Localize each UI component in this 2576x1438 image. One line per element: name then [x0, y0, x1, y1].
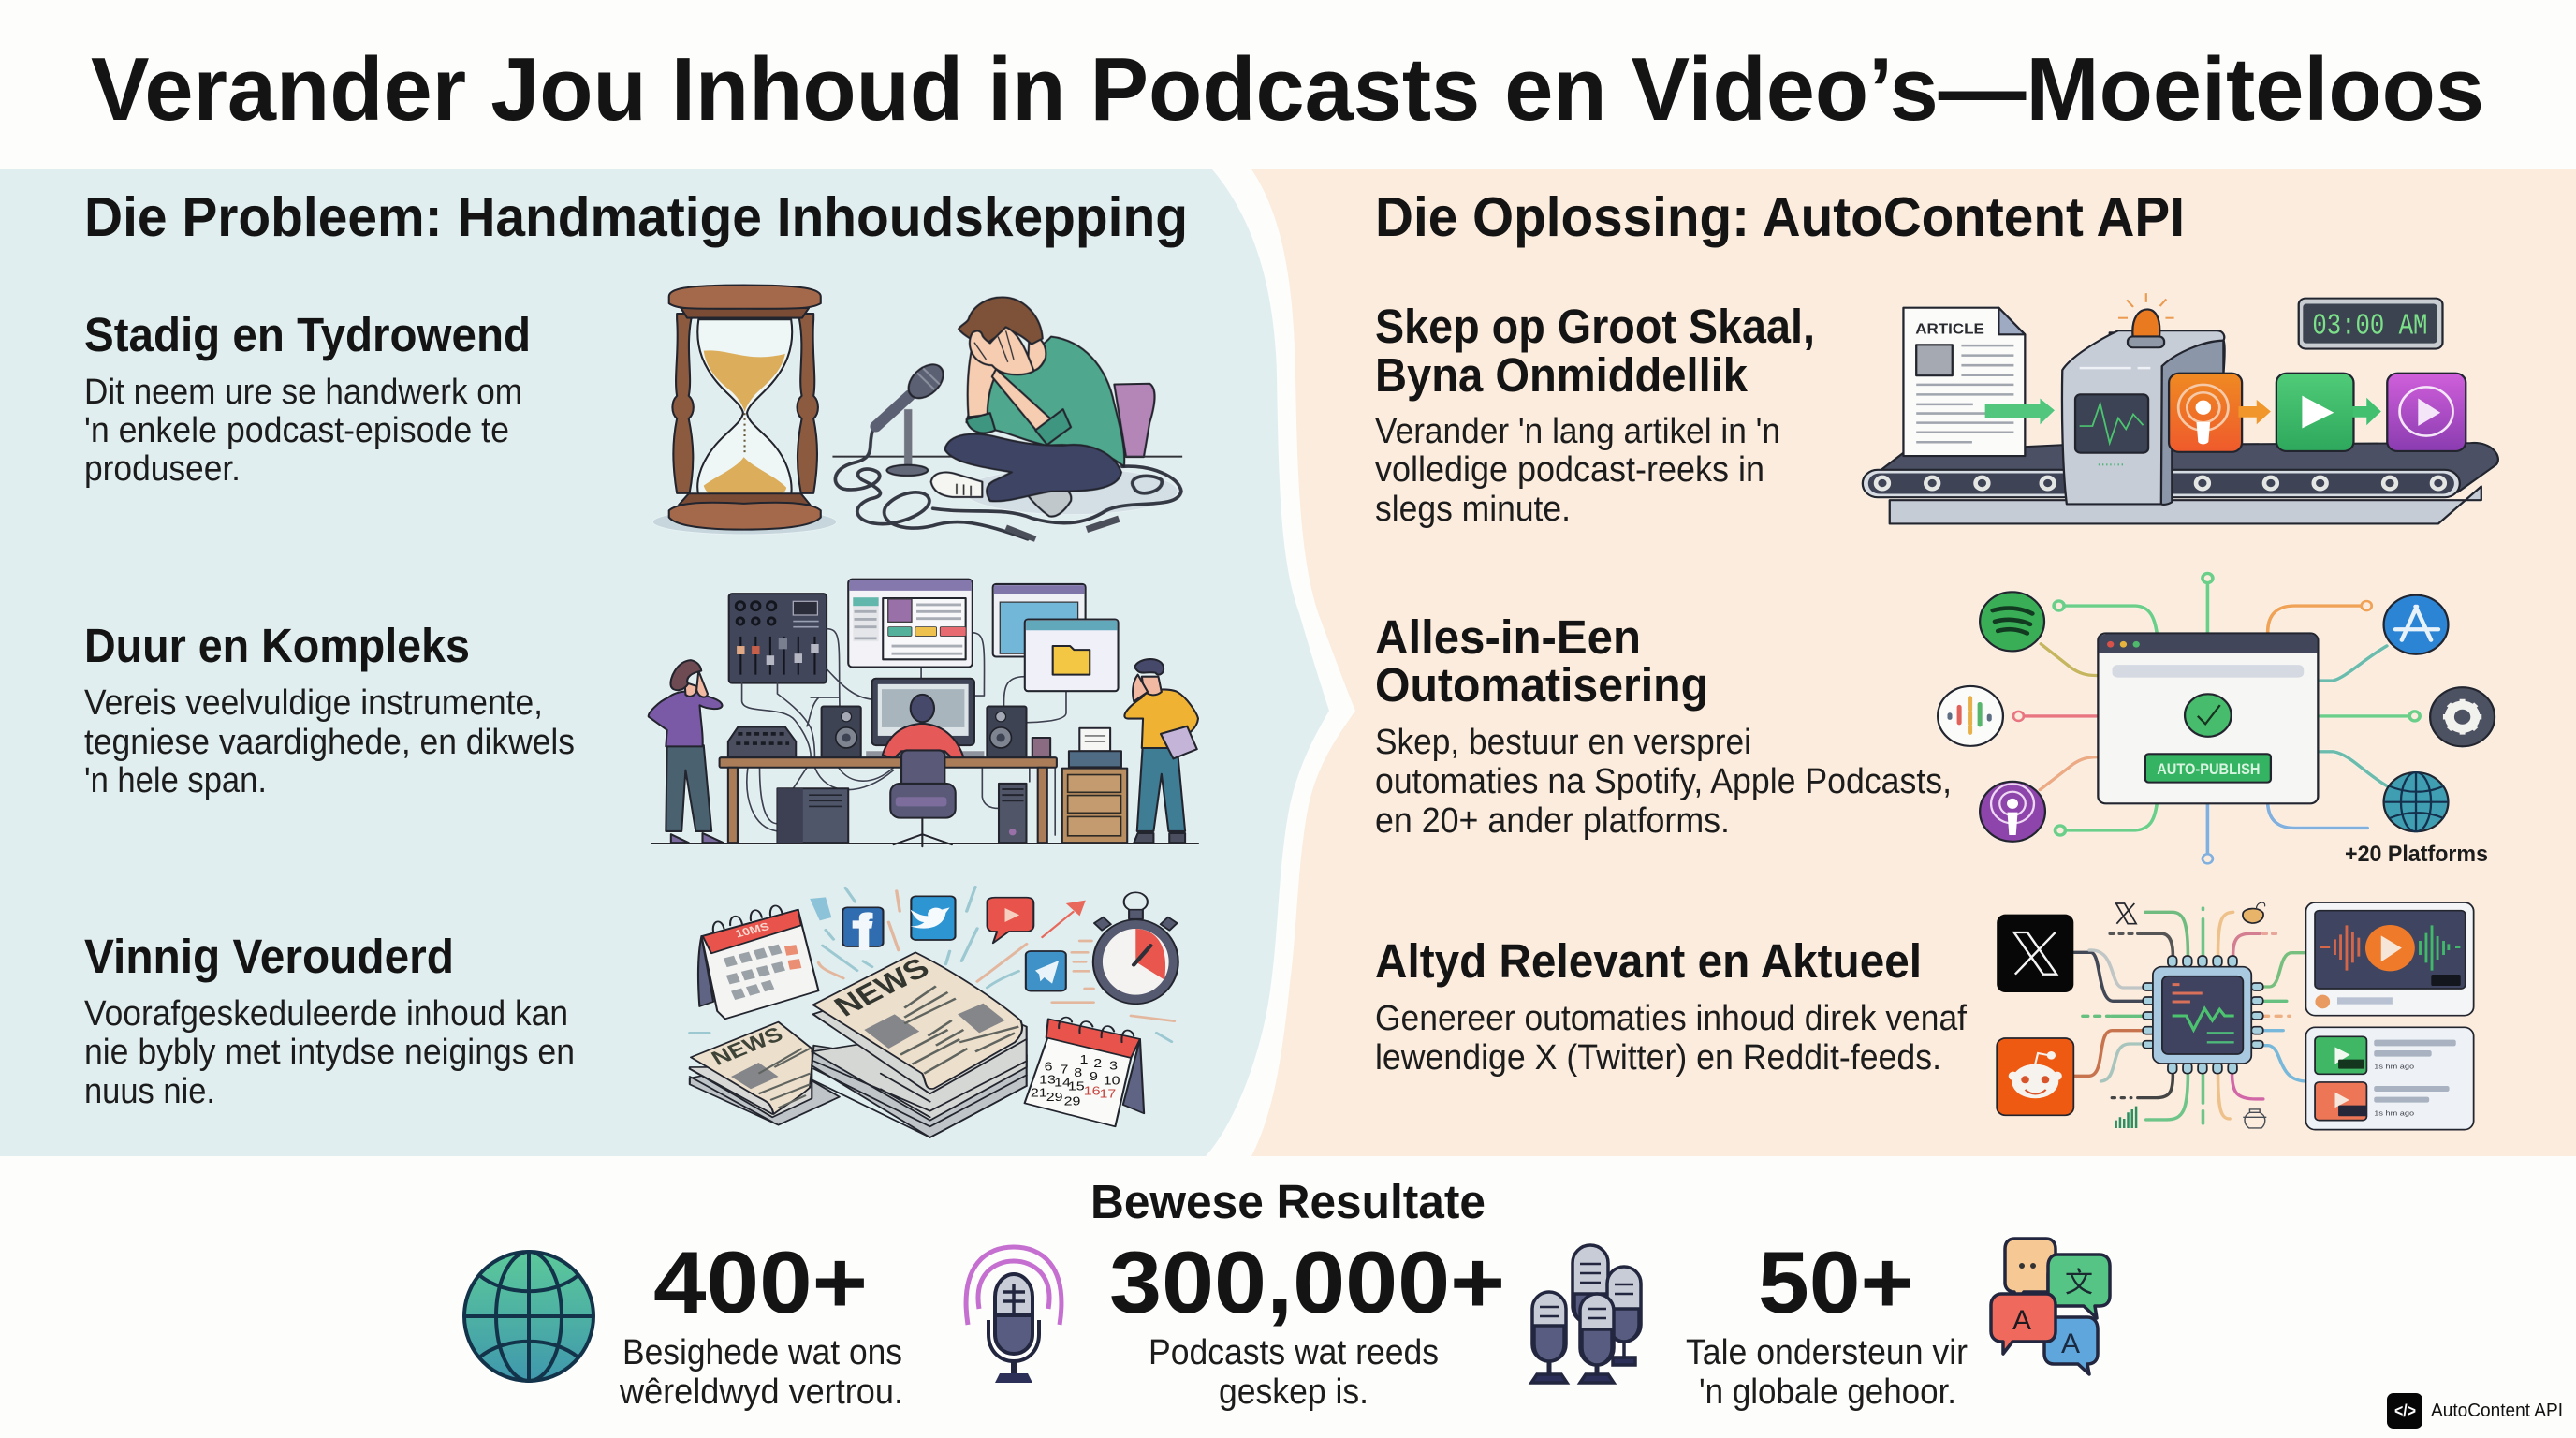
stat: languages	[1686, 1233, 1968, 1412]
problem item: slow and time-consuming: 'n enkele podcast-episode te	[84, 411, 509, 450]
icon: feed list card: 1s hm ago	[2374, 1109, 2415, 1118]
desk	[720, 727, 1057, 843]
solution item: relevant: Genereer outomaties inhoud direk venaf	[1375, 999, 1967, 1038]
speed marks	[690, 887, 1175, 1042]
icon: calendar right: 9	[1090, 1070, 1098, 1083]
computer towers	[777, 784, 1026, 843]
arrow	[1985, 399, 2055, 424]
icon: calendar right: 21	[1031, 1087, 1047, 1100]
icon: calendar right: 29	[1064, 1095, 1080, 1108]
icon: play tile	[2276, 374, 2353, 451]
stat: languages: Tale ondersteun vir	[1686, 1333, 1968, 1372]
icon: video card	[2305, 902, 2474, 1016]
icon: mixer panel	[729, 594, 827, 683]
arrow	[2238, 400, 2271, 424]
illustration: stressed podcaster	[832, 297, 1182, 539]
icon: google podcasts	[1938, 686, 2003, 746]
icon: podcast tile	[2169, 374, 2242, 452]
icon: calendar right: 16	[1084, 1085, 1100, 1098]
cables	[742, 629, 1066, 835]
problem item: slow and time-consuming: Stadig en Tydrowend	[84, 308, 531, 361]
icon: browser window	[2098, 633, 2318, 803]
icon: calendar right: 29	[1046, 1091, 1063, 1104]
stat: businesses: Besighede wat ons	[622, 1333, 902, 1372]
icon: globe	[2384, 772, 2448, 831]
icon: central monitor and person	[866, 679, 984, 758]
person: woman	[649, 660, 724, 843]
panel: problem background	[0, 169, 1329, 1156]
icon: translation chat bubbles	[1991, 1239, 2110, 1374]
stat: podcasts: 300,000+	[1109, 1233, 1505, 1331]
stat: podcasts: geskep is.	[1219, 1372, 1368, 1412]
icon: microphones stat	[1531, 1245, 1641, 1383]
icon: app store	[2384, 595, 2448, 654]
problem item: expensive and complex: 'n hele span.	[84, 761, 267, 800]
icon: video tile	[2387, 374, 2466, 451]
stat: businesses: 400+	[653, 1233, 868, 1331]
icon: calendar right: 2	[1093, 1057, 1102, 1070]
icon: large newspaper stack	[812, 952, 1027, 1137]
icon: calendar right: 14	[1054, 1077, 1071, 1090]
solution item: scale: Byna Onmiddellik	[1375, 348, 1749, 402]
heading: problem: Die Probleem: Handmatige Inhoudskepping	[84, 186, 1188, 248]
problem item: quickly outdated: Vinnig Verouderd	[84, 930, 454, 983]
icon: small newspaper stack	[690, 1022, 840, 1125]
icon: processor chip	[2143, 956, 2263, 1074]
panel: solution background	[1251, 169, 2576, 1156]
problem item: quickly outdated	[84, 930, 575, 1111]
icon: digital clock: 03:00 AM	[2312, 310, 2427, 343]
solution item: relevant: lewendige X (Twitter) en Reddit-feeds.	[1375, 1038, 1941, 1078]
stat: podcasts	[1109, 1233, 1505, 1412]
feed lines	[2074, 908, 2306, 1123]
icon: small x	[2116, 903, 2136, 924]
problem item: expensive and complex	[84, 619, 575, 800]
icon: calendar right: 3	[1109, 1060, 1118, 1073]
icon: calendar left	[698, 910, 818, 1019]
icon: red arrow	[1042, 901, 1086, 938]
machine	[2062, 293, 2225, 505]
icon: rings	[713, 905, 783, 932]
icon: article document: ARTICLE	[1915, 321, 1984, 337]
icon: calendar right: 8	[1074, 1066, 1082, 1079]
stat: podcasts: Podcasts wat reeds	[1149, 1333, 1439, 1372]
solution item: relevant: Altyd Relevant en Aktueel	[1375, 934, 1922, 988]
icon: feed list card	[2305, 1027, 2474, 1130]
icon: calendar right: 13	[1039, 1074, 1056, 1087]
solution item: automation: Skep, bestuur en versprei	[1375, 723, 1751, 762]
icon: small newspaper stack: NEWS	[708, 1023, 787, 1070]
illustration: conveyor automation	[1863, 293, 2498, 523]
icon: digital clock	[2299, 299, 2442, 349]
solution item: scale: Skep op Groot Skaal,	[1375, 300, 1815, 353]
icon: large newspaper stack: NEWS	[828, 952, 936, 1023]
stat: languages: 'n globale gehoor.	[1699, 1372, 1956, 1412]
problem item: slow and time-consuming: produseer.	[84, 449, 241, 489]
arrow	[2352, 398, 2381, 425]
solution item: automation: Outomatisering	[1375, 658, 1708, 712]
icon: translation chat bubbles: 文	[2065, 1268, 2093, 1299]
icon: browser window: AUTO-PUBLISH	[2157, 759, 2260, 778]
label: platforms: +20 Platforms	[2345, 842, 2488, 867]
illustration: complex production studio	[649, 580, 1199, 846]
icon: translation chat bubbles: A	[2012, 1305, 2031, 1336]
icon: spotify	[1980, 592, 2044, 651]
icon: calendar left: 10MS	[733, 919, 771, 940]
icon: stopwatch	[1093, 892, 1178, 1004]
conveyor base	[1863, 443, 2498, 523]
chair	[890, 750, 956, 846]
logo: AutoContent API	[2387, 1393, 2563, 1429]
icon: calendar right: 1	[1080, 1053, 1088, 1066]
person: man	[1124, 659, 1198, 843]
small icons	[2116, 902, 2266, 1128]
problem item: quickly outdated: nuus nie.	[84, 1072, 215, 1111]
solution item: scale: volledige podcast-reeks in	[1375, 450, 1764, 490]
icon: social media	[810, 896, 1066, 991]
solution item: relevant	[1375, 934, 1967, 1078]
icon: x square	[1997, 915, 2073, 992]
heading: solution: Die Oplossing: AutoContent API	[1375, 186, 2185, 248]
title: Verander Jou Inhoud in Podcasts en Video’s—Moeiteloos	[91, 39, 2484, 139]
icon: calendar right	[1025, 1018, 1144, 1126]
solution item: automation: Alles-in-Een	[1375, 610, 1641, 664]
solution item: automation: outomaties na Spotify, Apple Podcasts,	[1375, 762, 1952, 801]
illustration: live feeds processor	[1997, 902, 2474, 1130]
printer and cabinet	[1062, 728, 1127, 843]
problem item: expensive and complex: Vereis veelvuldige instrumente,	[84, 683, 543, 723]
icon: apple podcasts	[1980, 782, 2045, 842]
solution item: automation: en 20+ ander platforms.	[1375, 801, 1730, 841]
solution item: scale: Verander 'n lang artikel in 'n	[1375, 412, 1780, 451]
stat: businesses: wêreldwyd vertrou.	[619, 1372, 903, 1412]
speakers	[822, 707, 1026, 757]
stat: businesses	[619, 1233, 903, 1412]
icon: browser windows right	[993, 584, 1119, 691]
solution item: scale	[1375, 300, 1815, 529]
icon: calendar right: 6	[1045, 1061, 1053, 1074]
icon: calendar right: 17	[1100, 1088, 1116, 1101]
problem item: quickly outdated: nie bybly met intydse neigings en	[84, 1033, 575, 1072]
icon: globe stat	[464, 1252, 593, 1381]
connector lines	[2013, 573, 2420, 863]
icon: reddit square	[1997, 1038, 2073, 1115]
problem item: expensive and complex: Duur en Kompleks	[84, 619, 470, 672]
problem item: slow and time-consuming: Dit neem ure se handwerk om	[84, 373, 522, 412]
solution item: automation	[1375, 610, 1952, 841]
problem item: quickly outdated: Voorafgeskeduleerde inhoud kan	[84, 994, 568, 1034]
icon: feed list card: 1s hm ago	[2374, 1063, 2415, 1071]
icon: calendar right: 7	[1060, 1064, 1068, 1077]
icon: calendar right: 10	[1104, 1075, 1120, 1088]
solution item: scale: slegs minute.	[1375, 490, 1571, 529]
logo: AutoContent API: AutoContent API	[2431, 1401, 2563, 1421]
logo: AutoContent API: </>	[2394, 1401, 2416, 1420]
icon: microphone stat	[966, 1247, 1061, 1383]
illustration: outdated news and social media	[690, 887, 1178, 1137]
icon: browser window main	[848, 580, 973, 667]
problem item: expensive and complex: tegniese vaardighede, en dikwels	[84, 723, 575, 762]
icon: translation chat bubbles: A	[2061, 1328, 2080, 1359]
problem item: slow and time-consuming	[84, 308, 531, 489]
icon: settings gear	[2430, 687, 2495, 746]
illustration: hourglass	[653, 285, 836, 534]
heading: results: Bewese Resultate	[1090, 1175, 1486, 1228]
icon: calendar right: 15	[1068, 1080, 1085, 1093]
icon: article document	[1903, 308, 2025, 456]
stat: languages: 50+	[1758, 1233, 1914, 1331]
illustration: auto-publish hub	[1938, 573, 2495, 863]
